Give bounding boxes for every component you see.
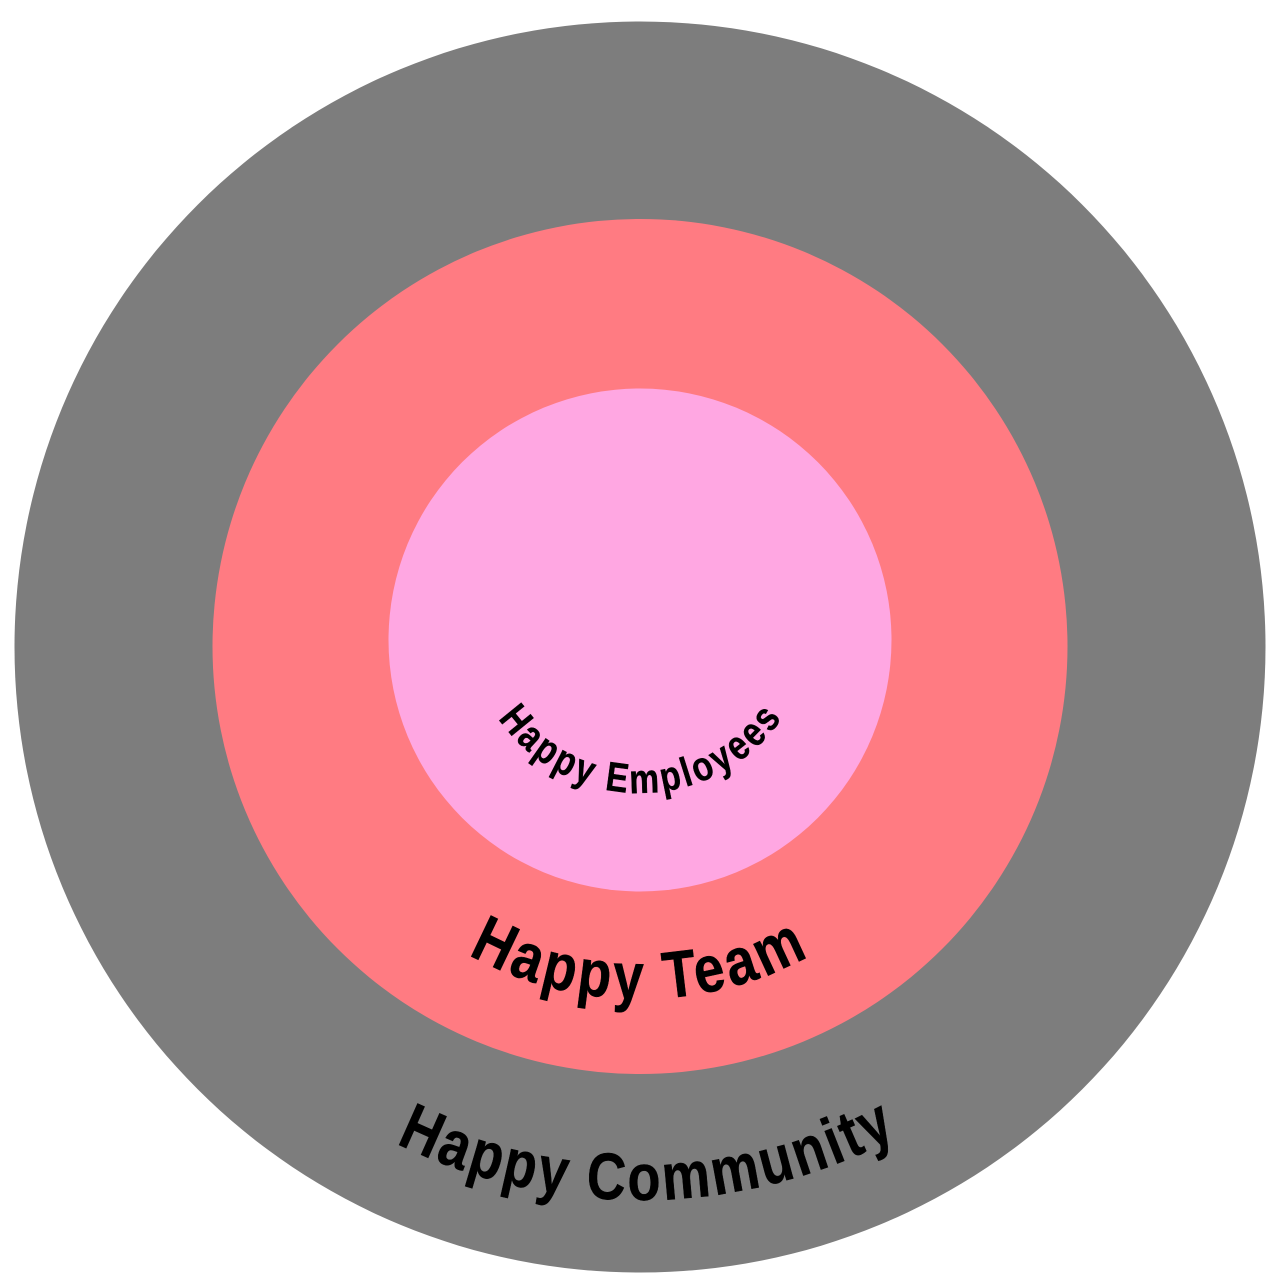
- middle ring: happy team: [212, 219, 1068, 1074]
- label: happy team: Happy Team: [470, 915, 806, 1012]
- label: happy employees: Happy Employees: [499, 702, 779, 800]
- inner circle: happy employees: [388, 388, 892, 892]
- label: happy community: Happy Community: [398, 1103, 888, 1206]
